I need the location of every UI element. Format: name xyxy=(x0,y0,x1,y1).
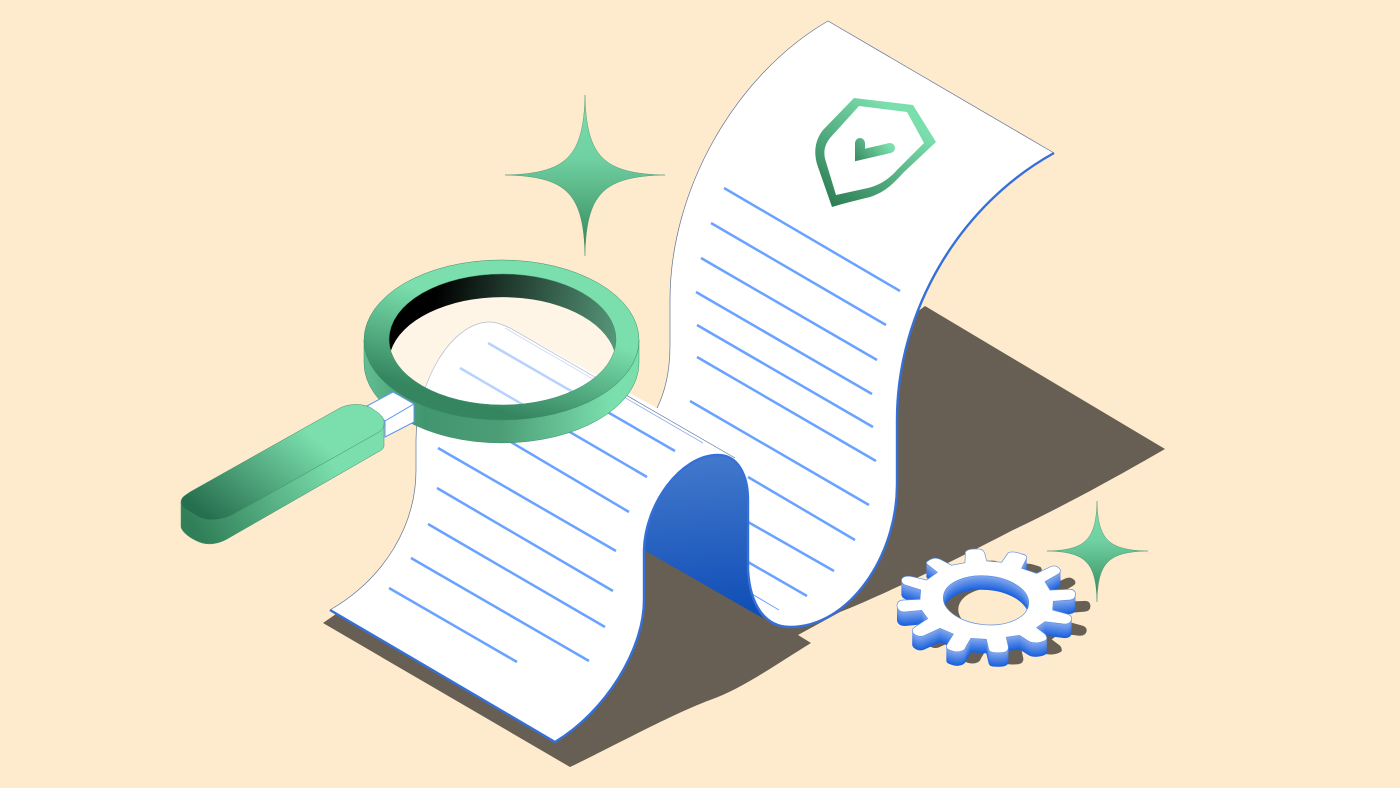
paper sheet xyxy=(330,21,1054,742)
gear xyxy=(897,549,1090,667)
handle top xyxy=(181,404,384,520)
ring outer rim xyxy=(364,340,639,443)
sparkle: small xyxy=(1047,501,1148,602)
icon: shield with check xyxy=(815,98,936,207)
paper edges xyxy=(330,21,1054,742)
gear top face xyxy=(897,549,1075,653)
gear shadow xyxy=(912,561,1090,664)
lens glass xyxy=(389,274,616,405)
ring top face xyxy=(364,260,639,420)
document shadow xyxy=(323,306,1165,767)
handle side xyxy=(181,424,384,544)
magnifier xyxy=(181,260,639,544)
paper underside xyxy=(644,455,764,619)
text lines xyxy=(389,188,900,662)
document xyxy=(330,21,1054,742)
ring inner wall xyxy=(389,274,616,351)
handle neck xyxy=(367,392,414,437)
sparkle: large xyxy=(505,95,665,256)
gear side walls xyxy=(897,550,1075,667)
